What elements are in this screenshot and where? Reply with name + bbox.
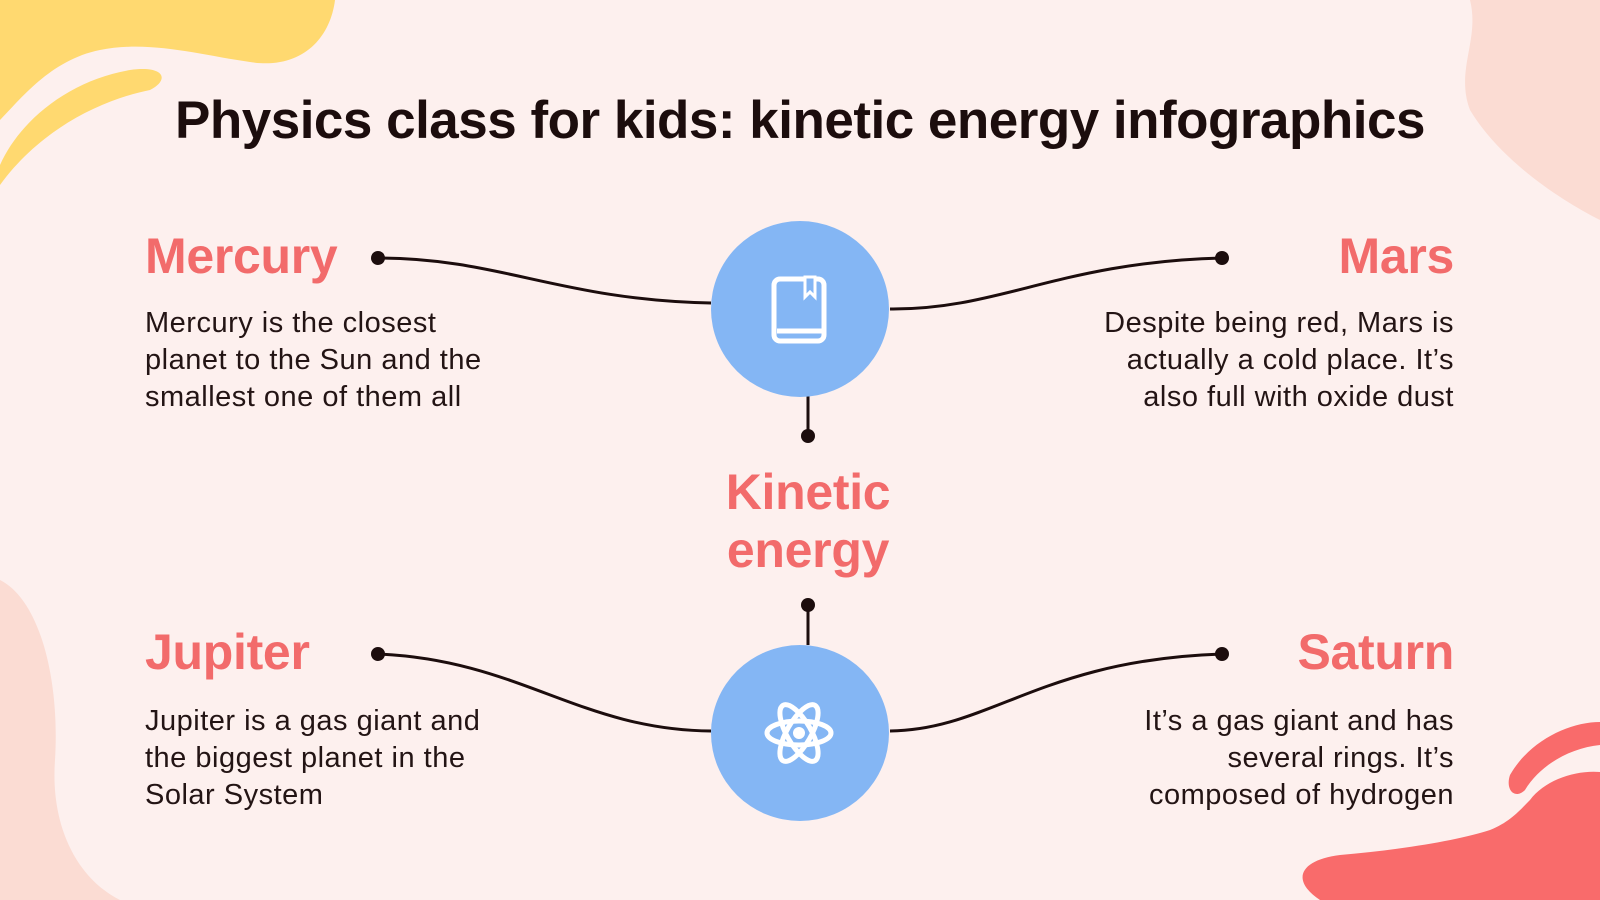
heading: Jupiter [145, 624, 310, 680]
text: planet to the Sun and the [145, 344, 482, 376]
text: Mercury is the closest [145, 307, 436, 339]
text: Jupiter is a gas giant and [145, 705, 480, 737]
text: several rings. It’s [1227, 742, 1454, 774]
text: Despite being red, Mars is [1104, 307, 1454, 339]
title: Physics class for kids: kinetic energy infographics [175, 91, 1425, 150]
text: actually a cold place. It’s [1127, 344, 1454, 376]
text: also full with oxide dust [1143, 381, 1454, 413]
text: It’s a gas giant and has [1144, 705, 1454, 737]
center label: energy [727, 522, 889, 578]
text: Solar System [145, 779, 323, 811]
heading: Mercury [145, 228, 337, 284]
heading: Saturn [1297, 624, 1454, 680]
panel: Mercury [145, 228, 482, 413]
panel: Mars [1104, 228, 1454, 413]
text [145, 705, 480, 811]
text: the biggest planet in the [145, 742, 465, 774]
text: smallest one of them all [145, 381, 462, 413]
panel: Saturn [1144, 624, 1454, 811]
text [1104, 307, 1454, 413]
text [145, 307, 482, 413]
text [1144, 705, 1454, 811]
center label: Kinetic [726, 464, 890, 520]
icon circle: atom [711, 645, 889, 821]
heading: Mars [1338, 228, 1454, 284]
icon circle: book [711, 221, 889, 397]
text: composed of hydrogen [1149, 779, 1454, 811]
panel: Jupiter [145, 624, 480, 811]
center label [726, 464, 890, 578]
